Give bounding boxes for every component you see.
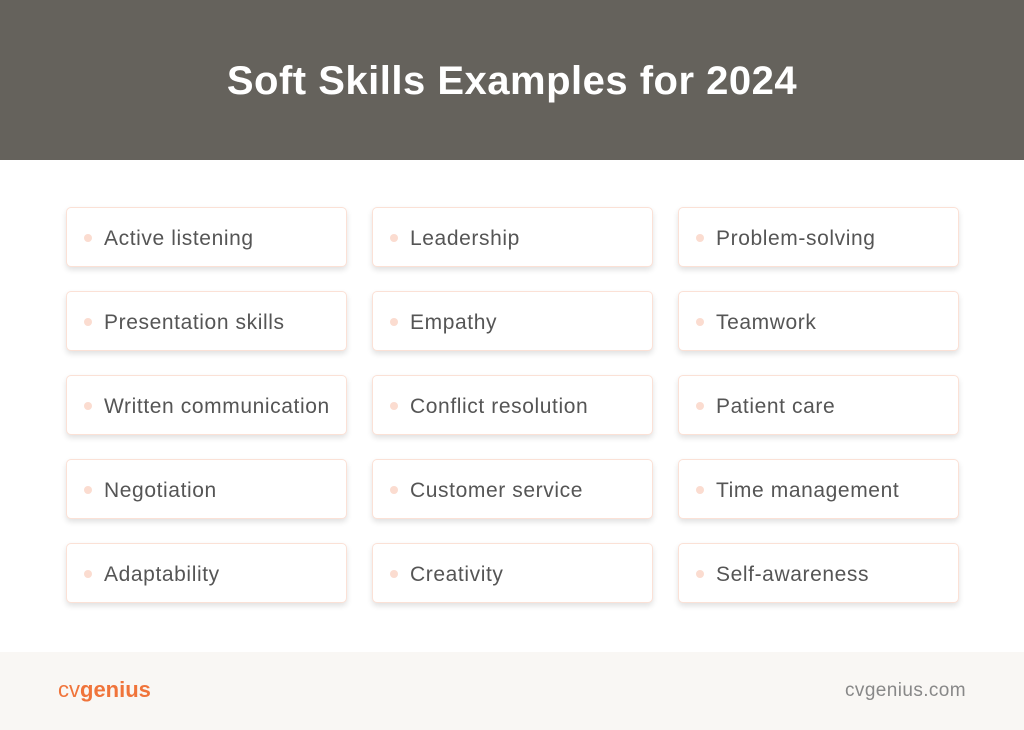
card: Time management: Time management [716,479,899,502]
card: Written communication [66,375,347,435]
card: Creativity: Creativity [410,563,504,586]
card: Active listening: Active listening [104,227,254,250]
card: Presentation skills: Presentation skills [104,311,285,334]
title [0,0,1024,160]
card: Conflict resolution: Conflict resolution [410,395,588,418]
card: Teamwork [678,291,959,351]
card: Leadership: Leadership [410,227,520,250]
card: Negotiation: Negotiation [104,479,217,502]
card: Self-awareness [678,543,959,603]
card: Teamwork: Teamwork [716,311,816,334]
card: Problem-solving: Problem-solving [716,227,876,250]
card: Empathy [372,291,653,351]
card: Patient care [678,375,959,435]
card: Written communication: Written communication [104,395,330,418]
card: Negotiation [66,459,347,519]
card: Leadership [372,207,653,267]
card: Customer service [372,459,653,519]
card: Adaptability: Adaptability [104,563,220,586]
card: Time management [678,459,959,519]
card: Self-awareness: Self-awareness [716,563,869,586]
card: Customer service: Customer service [410,479,583,502]
card: Problem-solving [678,207,959,267]
footer [0,652,1024,730]
card: Conflict resolution [372,375,653,435]
card: Creativity [372,543,653,603]
title: Soft Skills Examples for 2024 [227,59,797,103]
card: Patient care: Patient care [716,395,835,418]
card: Presentation skills [66,291,347,351]
card: Empathy: Empathy [410,311,497,334]
card: Adaptability [66,543,347,603]
logo: cvgenius [58,677,151,702]
card: Active listening [66,207,347,267]
footer url: cvgenius.com [845,680,966,701]
